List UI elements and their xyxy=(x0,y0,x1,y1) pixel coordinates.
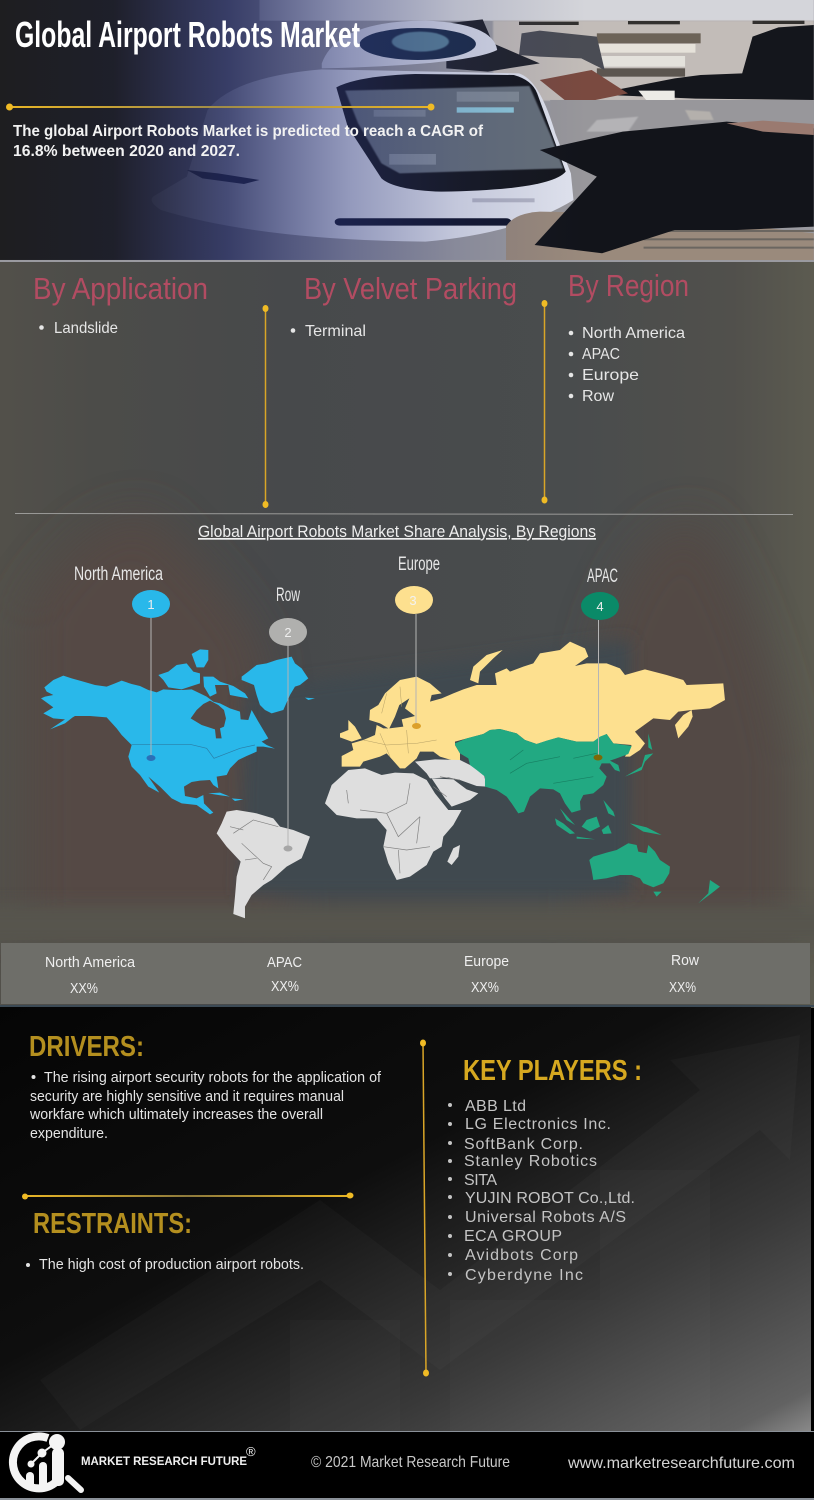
map: south america xyxy=(217,810,310,918)
icon: company logo xyxy=(13,1434,81,1490)
vertical divider 1 xyxy=(262,305,268,508)
drivers text: security are highly sensitive and it requires manual xyxy=(30,1088,344,1105)
heading: by velvet parking: By Velvet Parking xyxy=(304,271,517,306)
heading: by application: By Application xyxy=(33,271,208,306)
segment: by region xyxy=(568,268,689,405)
label: north america: North America xyxy=(74,564,163,585)
cell: north america: XX% xyxy=(70,980,98,997)
key players list: LG Electronics Inc. xyxy=(465,1116,611,1133)
pin: north america: 1 xyxy=(147,597,155,612)
label: europe: Europe xyxy=(398,554,440,575)
lower panel background xyxy=(0,1005,814,1432)
pin: row: 2 xyxy=(284,625,292,640)
pin: row xyxy=(269,618,307,852)
drivers text: The rising airport security robots for the application of xyxy=(44,1069,382,1086)
website: www.marketresearchfuture.com xyxy=(567,1455,795,1472)
segment: by application xyxy=(33,271,208,337)
pin: apac: 4 xyxy=(596,599,604,614)
key players list: SITA xyxy=(464,1172,497,1189)
vertical divider lower xyxy=(420,1040,429,1376)
key players list: Stanley Robotics xyxy=(464,1153,597,1170)
label: apac: APAC xyxy=(587,566,618,587)
cell: row: XX% xyxy=(669,979,696,996)
key players list xyxy=(448,1098,635,1284)
list: region items: North America xyxy=(582,325,685,342)
logo wordmark: ® xyxy=(246,1444,256,1459)
key players heading: KEY PLAYERS : xyxy=(463,1055,642,1087)
key players list: Avidbots Corp xyxy=(465,1247,578,1264)
cell: row xyxy=(669,952,699,996)
key players list: SoftBank Corp. xyxy=(464,1136,583,1153)
hero title: Global Airport Robots Market xyxy=(15,14,360,55)
share table xyxy=(1,943,810,1004)
list: region items: Row xyxy=(582,388,614,405)
list: velvet parking items: Terminal xyxy=(305,323,366,340)
hero photo: airport robot xyxy=(0,0,814,262)
hero divider xyxy=(6,104,434,110)
heading: by region: By Region xyxy=(568,268,689,303)
logo wordmark xyxy=(81,1444,256,1468)
logo wordmark: MARKET RESEARCH FUTURE xyxy=(81,1456,247,1468)
map: asia pacific xyxy=(455,729,720,903)
key players list: Cyberdyne Inc xyxy=(465,1267,583,1284)
cell: europe: Europe xyxy=(464,953,509,970)
cell: europe: XX% xyxy=(471,979,499,996)
drivers text: workfare which ultimately increases the overall xyxy=(29,1106,323,1123)
key players list: ECA GROUP xyxy=(464,1228,562,1245)
map: europe and russia xyxy=(340,642,725,768)
restraints text: The high cost of production airport robots. xyxy=(39,1256,304,1273)
drivers heading: DRIVERS: xyxy=(29,1031,144,1063)
cell: row: Row xyxy=(671,952,699,969)
list: application items: Landslide xyxy=(54,320,118,337)
footer bar xyxy=(0,1431,814,1500)
vertical divider 2 xyxy=(542,300,548,504)
list: region items: APAC xyxy=(582,346,620,363)
cell: apac: XX% xyxy=(271,978,299,995)
map heading: Global Airport Robots Market Share Analysis, By Regions xyxy=(198,522,596,541)
hero description xyxy=(13,123,484,160)
drivers text: expenditure. xyxy=(30,1125,108,1142)
map: africa and middle east xyxy=(325,759,487,880)
cell: apac xyxy=(267,954,302,995)
cell: north america xyxy=(45,954,136,997)
key players list: YUJIN ROBOT Co.,Ltd. xyxy=(465,1190,635,1207)
map: north america xyxy=(41,649,315,814)
drivers text xyxy=(29,1069,382,1142)
restraints heading: RESTRAINTS: xyxy=(33,1208,192,1240)
divider between drivers and restraints xyxy=(22,1192,354,1200)
cell: north america: North America xyxy=(45,954,136,971)
cell: europe xyxy=(464,953,509,996)
segment: by velvet parking xyxy=(291,271,517,340)
list: region items xyxy=(569,325,685,405)
middle background panel xyxy=(0,260,814,1008)
pin: apac xyxy=(581,592,619,760)
cell: apac: APAC xyxy=(267,954,302,971)
copyright: © 2021 Market Research Future xyxy=(311,1454,510,1471)
label: row: Row xyxy=(276,585,300,606)
world map xyxy=(41,554,725,918)
hero description: The global Airport Robots Market is predicted to reach a CAGR of xyxy=(13,123,484,140)
pin: europe xyxy=(395,586,433,729)
list: region items: Europe xyxy=(582,367,639,384)
key players list: Universal Robots A/S xyxy=(465,1209,626,1226)
key players list: ABB Ltd xyxy=(465,1098,526,1115)
pin: north america xyxy=(132,590,170,761)
hero description: 16.8% between 2020 and 2027. xyxy=(13,143,240,160)
pin: europe: 3 xyxy=(409,593,417,608)
